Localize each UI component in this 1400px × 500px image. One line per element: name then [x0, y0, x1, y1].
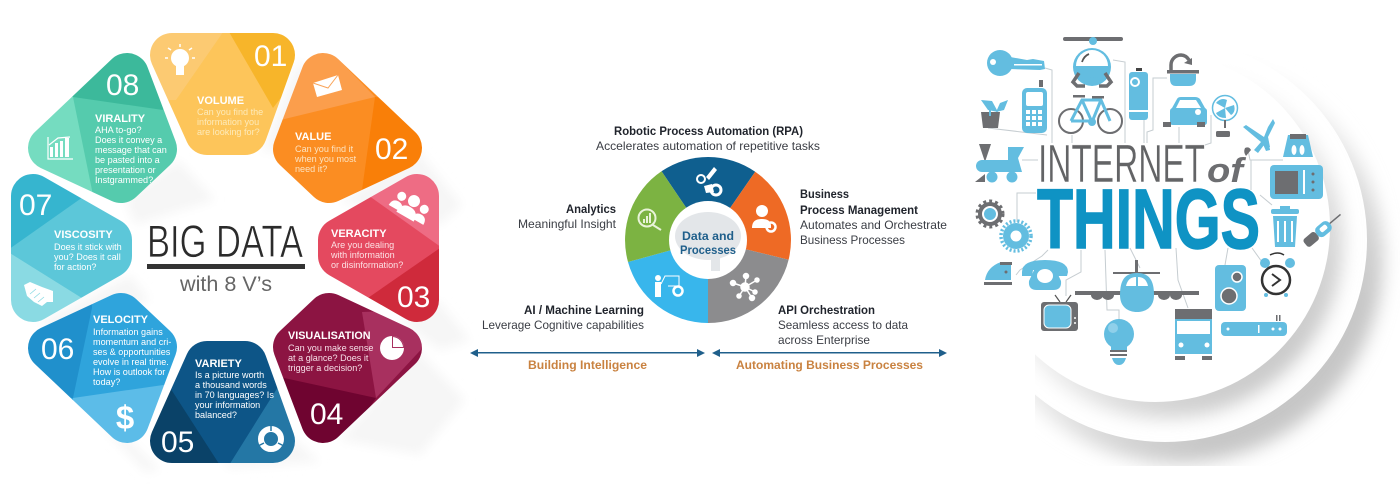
icon: speaker [1215, 265, 1246, 311]
petal 04 visualisation: VISUALISATION [288, 330, 371, 342]
petal 05 variety: Is a picture worth [195, 370, 264, 380]
petal 06 velocity: VELOCITY [93, 314, 149, 326]
petal 05 variety: a thousand words [195, 380, 267, 390]
petal 03 veracity [318, 174, 439, 322]
petal 07 viscosity: VISCOSITY [54, 229, 113, 241]
icon: people [388, 186, 434, 227]
label: RPA: Robotic Process Automation (RPA) [614, 126, 803, 138]
icon: car [1163, 97, 1207, 127]
petal 08 virality: AHA to-go? [95, 125, 142, 135]
panel: internet of things [963, 37, 1383, 463]
icon: battery [1129, 68, 1148, 120]
petal 03 veracity: or disinformation? [331, 260, 403, 270]
icon: airplane front [1075, 260, 1199, 312]
label: business process management: Automates and Orchestrate [800, 218, 947, 232]
label: AI machine learning [482, 305, 644, 332]
icon: light bulb [165, 44, 195, 75]
donut chart: Data and [682, 231, 734, 243]
petal 02 value: when you most [294, 154, 357, 164]
icon: trash can [1271, 206, 1299, 247]
icon: envelope [313, 75, 342, 97]
petal 04 visualisation [273, 293, 422, 443]
icon: network hub [730, 274, 759, 300]
petal 07 viscosity: Does it stick with [54, 242, 122, 252]
icon: robot arm [697, 167, 721, 195]
label: business process management [800, 189, 947, 247]
icon: handshake [24, 282, 53, 306]
petal 07 viscosity: for action? [54, 262, 96, 272]
petal 06 velocity: Information gains [93, 327, 163, 337]
title: internet of things [1037, 134, 1260, 266]
icon: bathtub [1167, 55, 1199, 86]
petal 03 veracity: with information [330, 250, 395, 260]
petal 02 value: VALUE [295, 131, 331, 143]
petal 02 value: Can you find it [295, 144, 354, 154]
icon: airplane small [1243, 119, 1275, 156]
petal 06 velocity [28, 293, 177, 443]
icon: mobile phone [1022, 80, 1047, 133]
icon: analytics magnifier [638, 210, 661, 230]
petal 01 volume: Can you find the [197, 107, 263, 117]
panel: big data with 8 Vs [5, 25, 470, 472]
label: API orchestration [778, 305, 908, 347]
label: business process management: Business [800, 189, 849, 201]
caption: building intelligence: Building Intelligence [528, 358, 647, 372]
donut chart [625, 157, 791, 323]
backdrop circles [1035, 107, 1392, 466]
icon: clothes iron [984, 262, 1012, 285]
petal 08 virality: presentation or [95, 165, 156, 175]
icon: gray gear [977, 201, 1003, 227]
label: business process management: Process Management [800, 205, 918, 217]
label: RPA [596, 126, 820, 153]
petal 05 variety: your information [195, 400, 260, 410]
label: API orchestration: across Enterprise [778, 333, 870, 347]
label: analytics: Meaningful Insight [518, 217, 617, 231]
icon: microwave [1270, 165, 1323, 199]
icon: plant pot [981, 100, 1008, 128]
icon: alarm clock [1260, 253, 1295, 297]
icon: presenter with gear [655, 275, 682, 297]
petal 06 velocity: 06 [41, 333, 74, 366]
icon: blue gear [1001, 221, 1031, 251]
panel: data and processes [470, 126, 947, 372]
petal 04 visualisation: Can you make sense [288, 343, 373, 353]
icon: pie chart [380, 336, 404, 360]
icon: drone helicopter [1063, 37, 1123, 86]
icon: router [1221, 315, 1287, 336]
icon: scale [1283, 134, 1313, 157]
label: API orchestration: API Orchestration [778, 305, 875, 317]
petal 06 velocity: today? [93, 377, 120, 387]
label: analytics [518, 204, 617, 231]
icon: bar chart [48, 137, 73, 159]
petal 06 velocity: evolve in real time. [93, 357, 169, 367]
petal 08 virality: 08 [106, 69, 139, 102]
title: internet of things: of [1207, 152, 1247, 190]
heading: big data [147, 216, 305, 296]
petal 08 virality: Does it convey a [95, 135, 163, 145]
title: internet of things: INTERNET [1038, 134, 1205, 194]
caption: automating business processes: Automating Business Processes [736, 358, 923, 372]
petal 02 value: need it? [295, 164, 327, 174]
petal 05 variety: balanced? [195, 410, 237, 420]
petal 01 volume: VOLUME [197, 95, 244, 107]
icon: electric fan [1212, 96, 1238, 137]
icon: plug [1302, 210, 1345, 249]
petal 07 viscosity: 07 [19, 189, 52, 222]
icon: light bulb [1104, 319, 1134, 365]
petal 05 variety [150, 341, 295, 463]
petal 05 variety: in 70 languages? Is [195, 390, 274, 400]
heading: big data: with 8 V’s [179, 273, 272, 296]
petal 08 virality: Instgrammed? [95, 175, 153, 185]
icon: key [987, 50, 1045, 76]
icon: manager with gear [752, 205, 776, 232]
petal 06 velocity: momentum and cri- [93, 337, 171, 347]
icon: bus [1175, 309, 1212, 360]
petal 01 volume: information you [197, 117, 259, 127]
petal 04 visualisation: 04 [310, 398, 343, 431]
brain motif [675, 212, 741, 271]
icon: toy train [975, 144, 1024, 182]
label: analytics: Analytics [566, 204, 616, 216]
petal 08 virality: VIRALITY [95, 113, 146, 125]
petal 01 volume: 01 [254, 40, 287, 73]
petal 02 value [273, 53, 422, 203]
petal 07 viscosity [11, 174, 132, 322]
connector lines [988, 60, 1283, 320]
arrow: automating business processes [712, 349, 947, 357]
petal 05 variety: 05 [161, 426, 194, 459]
heading: big data: BIG DATA [147, 216, 303, 267]
petal 04 visualisation: trigger a decision? [288, 363, 362, 373]
petal 05 variety: VARIETY [195, 358, 243, 370]
petal 06 velocity: ses & opportunities [93, 347, 171, 357]
petal 03 veracity: VERACITY [331, 228, 387, 240]
petal 04 visualisation: at a glance? Does it [288, 353, 369, 363]
icon: telephone [1022, 260, 1068, 290]
icon: bicycle [1059, 95, 1122, 133]
label: AI machine learning: AI / Machine Learning [524, 305, 644, 317]
title: internet of things: THINGS [1037, 172, 1260, 266]
petal 01 volume: are looking for? [197, 127, 260, 137]
icon: television [1041, 295, 1078, 331]
petal 01 volume [150, 33, 295, 155]
label: RPA: Accelerates automation of repetitive tasks [596, 139, 820, 153]
icon: circular arrows [258, 425, 284, 449]
petal 03 veracity: 03 [397, 281, 430, 314]
label: API orchestration: Seamless access to data [778, 318, 908, 332]
label: business process management: Business Processes [800, 233, 905, 247]
petal 02 value: 02 [375, 133, 408, 166]
petal 08 virality [28, 53, 177, 203]
petal 06 velocity: How is outlook for [93, 367, 165, 377]
petal 08 virality: message that can [95, 145, 167, 155]
petal 07 viscosity: you? Does it call [54, 252, 121, 262]
donut chart: Processes [680, 245, 736, 257]
petal 08 virality: be pasted into a [95, 155, 161, 165]
label: AI machine learning: Leverage Cognitive capabilities [482, 318, 644, 332]
arrow: building intelligence [470, 349, 705, 357]
petal 03 veracity: Are you dealing [331, 240, 394, 250]
icon: dollar sign: $ [116, 399, 134, 436]
